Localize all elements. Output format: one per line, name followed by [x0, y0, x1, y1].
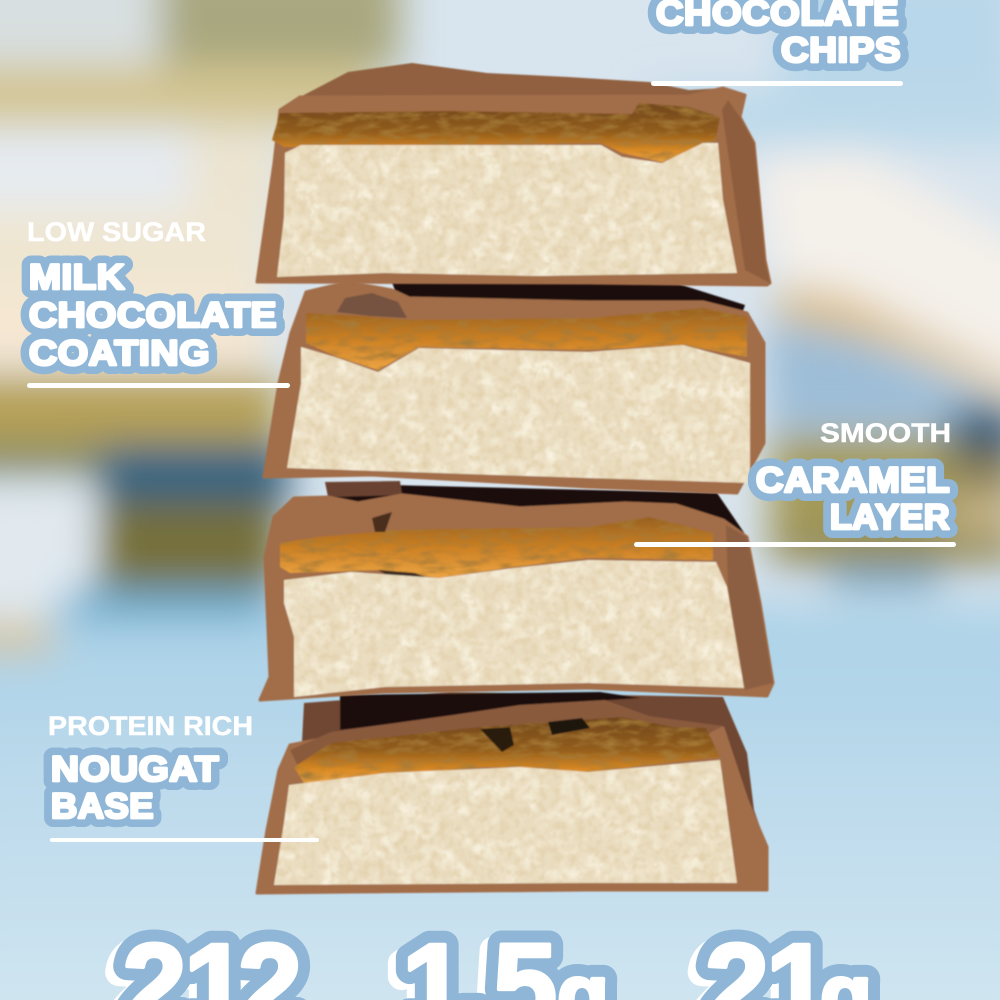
heading outline: nougat base [51, 750, 219, 826]
caramel 3 [280, 517, 713, 578]
heading outline: milk chocolate coating [29, 258, 277, 373]
heading: chocolate chips [656, 0, 901, 70]
caramel 1 [272, 103, 720, 162]
nougat 2 [287, 345, 750, 483]
nutrition stats row [114, 921, 872, 1000]
nougat 3 [284, 560, 744, 697]
caramel 2 [306, 308, 747, 370]
heading outline: nougat base: BASE [51, 787, 154, 826]
subheading: smooth: SMOOTH [820, 418, 951, 448]
heading: nougat base: NOUGAT [51, 750, 219, 789]
heading outline: milk chocolate coating: CHOCOLATE [29, 296, 277, 335]
heading: nougat base [51, 750, 219, 826]
back of bar 4 [300, 692, 767, 847]
label: chocolate chips [651, 0, 903, 86]
heading outline: chocolate chips [656, 0, 901, 70]
bar 3 [260, 481, 773, 700]
subheading: low sugar: LOW SUGAR [27, 217, 206, 247]
pointer line: caramel [634, 542, 956, 547]
heading: milk chocolate coating: MILK [29, 258, 125, 297]
label: low sugar milk chocolate coating [27, 217, 290, 388]
caramel 4 [294, 717, 720, 783]
heading: caramel layer: LAYER [830, 498, 950, 537]
heading outline: milk chocolate coating: MILK [29, 258, 125, 297]
label: smooth caramel layer [634, 418, 956, 547]
front chocolate 4 [257, 702, 767, 893]
bar 2 [264, 280, 764, 493]
front chocolate 3 [260, 495, 773, 700]
heading: nougat base: BASE [51, 787, 154, 826]
front chocolate 1 [257, 88, 770, 285]
gap shadow 2 [392, 280, 745, 320]
heading: milk chocolate coating: COATING [29, 334, 210, 373]
heading outline: nougat base: NOUGAT [51, 750, 219, 789]
top face 1 [300, 63, 745, 117]
gap shadow 3 [300, 484, 747, 560]
nougat 4 [274, 760, 737, 885]
heading: milk chocolate coating: CHOCOLATE [29, 296, 277, 335]
pointer line: coating [27, 383, 290, 388]
heading outline: milk chocolate coating: COATING [29, 334, 210, 373]
heading: caramel layer [756, 461, 950, 537]
bar 4: bottom [257, 692, 767, 893]
heading outline: caramel layer [756, 461, 950, 537]
heading: milk chocolate coating [29, 258, 277, 373]
nougat 1 [277, 143, 737, 277]
label: protein rich nougat base [48, 711, 319, 842]
heading outline: caramel layer: LAYER [830, 498, 950, 537]
heading: chocolate chips: CHIPS [781, 31, 901, 70]
pointer line: chocolate chips [651, 81, 903, 86]
bar 1: top [257, 63, 770, 285]
heading outline: caramel layer: CARAMEL [756, 461, 950, 500]
heading: caramel layer: CARAMEL [756, 461, 950, 500]
heading outline: chocolate chips: CHIPS [781, 31, 901, 70]
subheading: protein rich: PROTEIN RICH [48, 711, 253, 741]
front chocolate 2 [264, 282, 764, 493]
pointer line: nougat [50, 838, 319, 842]
